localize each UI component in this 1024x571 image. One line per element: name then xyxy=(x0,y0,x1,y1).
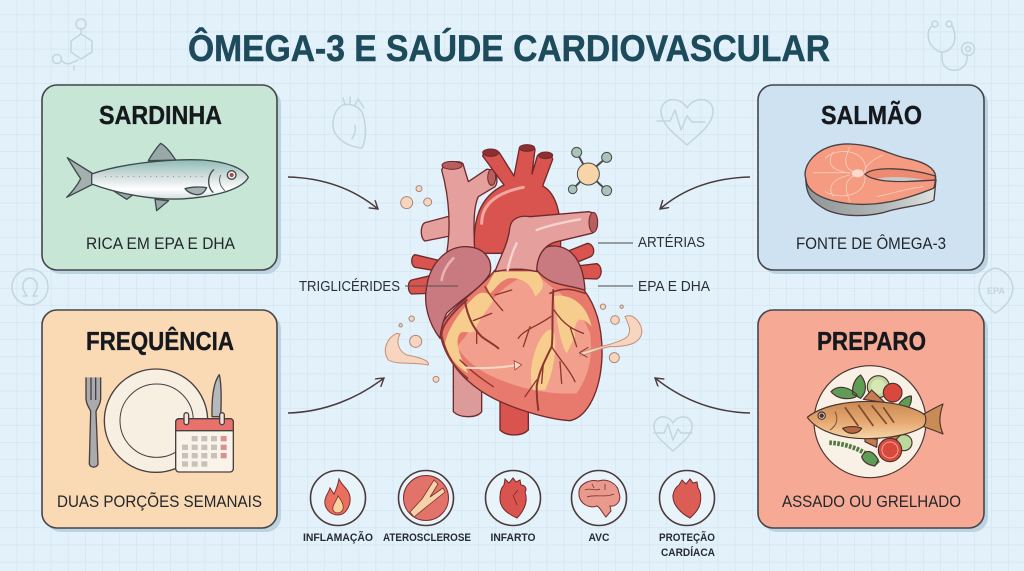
label: avc: AVC xyxy=(588,532,610,544)
heart illustration xyxy=(385,145,642,435)
icon: ventricle highlight xyxy=(457,273,591,394)
title: ÔMEGA-3 E SAÚDE CARDIOVASCULAR xyxy=(188,27,830,69)
caption: preparo: ASSADO OU GRELHADO xyxy=(782,492,961,511)
label: artérias: ARTÉRIAS xyxy=(638,234,705,251)
icon: fat deposits xyxy=(445,272,592,390)
panel: frequência xyxy=(42,310,281,532)
label: infarto: INFARTO xyxy=(490,532,536,544)
icon: tomato xyxy=(883,383,902,402)
caption: salmão: FONTE DE ÔMEGA-3 xyxy=(796,234,946,253)
icon: left atrium xyxy=(426,247,491,338)
icon: background heart pulse lower xyxy=(654,417,692,451)
icon: aorta arch xyxy=(474,146,561,253)
icon: background molecule xyxy=(52,19,92,70)
icon: omega droplet right xyxy=(580,316,642,356)
icon: omega arrow inner left xyxy=(463,365,520,368)
icon: molecule xyxy=(568,147,612,196)
icon: right atrium xyxy=(536,246,585,293)
icon: background omega badge xyxy=(12,269,48,305)
arrow: sardinha to heart xyxy=(288,177,378,209)
icon: aterosclerose xyxy=(398,470,454,526)
icon: pulmonary artery xyxy=(495,212,597,272)
label: proteção cardíaca: PROTEÇÃO xyxy=(659,531,715,544)
caption: sardinha: RICA EM EPA E DHA xyxy=(86,234,236,253)
icon: pulmonary veins xyxy=(408,216,601,294)
icon: lower vessels xyxy=(453,363,528,435)
label: EPA e DHA: EPA E DHA xyxy=(638,279,710,295)
label: artérias xyxy=(598,234,705,251)
heading: salmão: SALMÃO xyxy=(821,100,922,130)
arrow: frequência to heart xyxy=(288,378,384,413)
heading: sardinha: SARDINHA xyxy=(99,100,222,130)
icon: fork xyxy=(86,377,101,467)
label: triglicérides: TRIGLICÉRIDES xyxy=(299,278,400,295)
icon: plate, cutlery and calendar xyxy=(86,369,233,472)
caption: frequência: DUAS PORÇÕES SEMANAIS xyxy=(57,492,262,511)
icon: herbs xyxy=(829,443,878,463)
icon: proteção cardíaca xyxy=(660,470,714,526)
icon: knife xyxy=(212,375,221,417)
icon: coronary arteries xyxy=(442,287,585,410)
icon: salmon steak xyxy=(805,144,936,216)
icon: lettuce and cucumber xyxy=(831,375,865,399)
icon: inflamação xyxy=(310,470,366,526)
label: aterosclerose: ATEROSCLEROSE xyxy=(383,532,471,544)
panel: preparo xyxy=(758,310,988,532)
icon: ventricles xyxy=(439,270,602,421)
label: proteção cardíaca xyxy=(659,531,715,559)
icon: sardine xyxy=(67,143,248,211)
icon: infarto xyxy=(486,470,540,526)
icon: superior vena cava xyxy=(442,162,497,253)
heading: frequência: FREQUÊNCIA xyxy=(86,326,234,356)
icon: grilled fish on plate xyxy=(807,366,943,478)
panel: sardinha xyxy=(42,85,281,274)
icon: avc brain xyxy=(572,470,626,526)
icon: background EPA shield xyxy=(979,268,1013,313)
label: inflamação: INFLAMAÇÃO xyxy=(303,531,373,544)
label: proteção cardíaca: CARDÍACA xyxy=(661,546,715,559)
icon: background EPA shield: EPA xyxy=(987,286,1005,296)
panel: salmão xyxy=(758,85,988,274)
icon: plate xyxy=(814,366,926,478)
arrow: salmão to heart xyxy=(660,177,750,209)
heading: preparo: PREPARO xyxy=(817,326,926,356)
icon: grilled fish xyxy=(922,404,943,434)
label: EPA e DHA xyxy=(598,279,710,295)
icon: calendar xyxy=(176,419,233,472)
icon: omega droplet left xyxy=(385,333,428,365)
icon: background stethoscope xyxy=(928,21,974,70)
icon: background anatomical heart xyxy=(333,97,365,148)
icon: droplets xyxy=(399,186,623,382)
icon row: conditions xyxy=(303,470,715,559)
arrow: preparo to heart xyxy=(655,378,750,413)
icon: plate xyxy=(104,369,208,472)
icon: background heart with pulse xyxy=(657,100,713,145)
